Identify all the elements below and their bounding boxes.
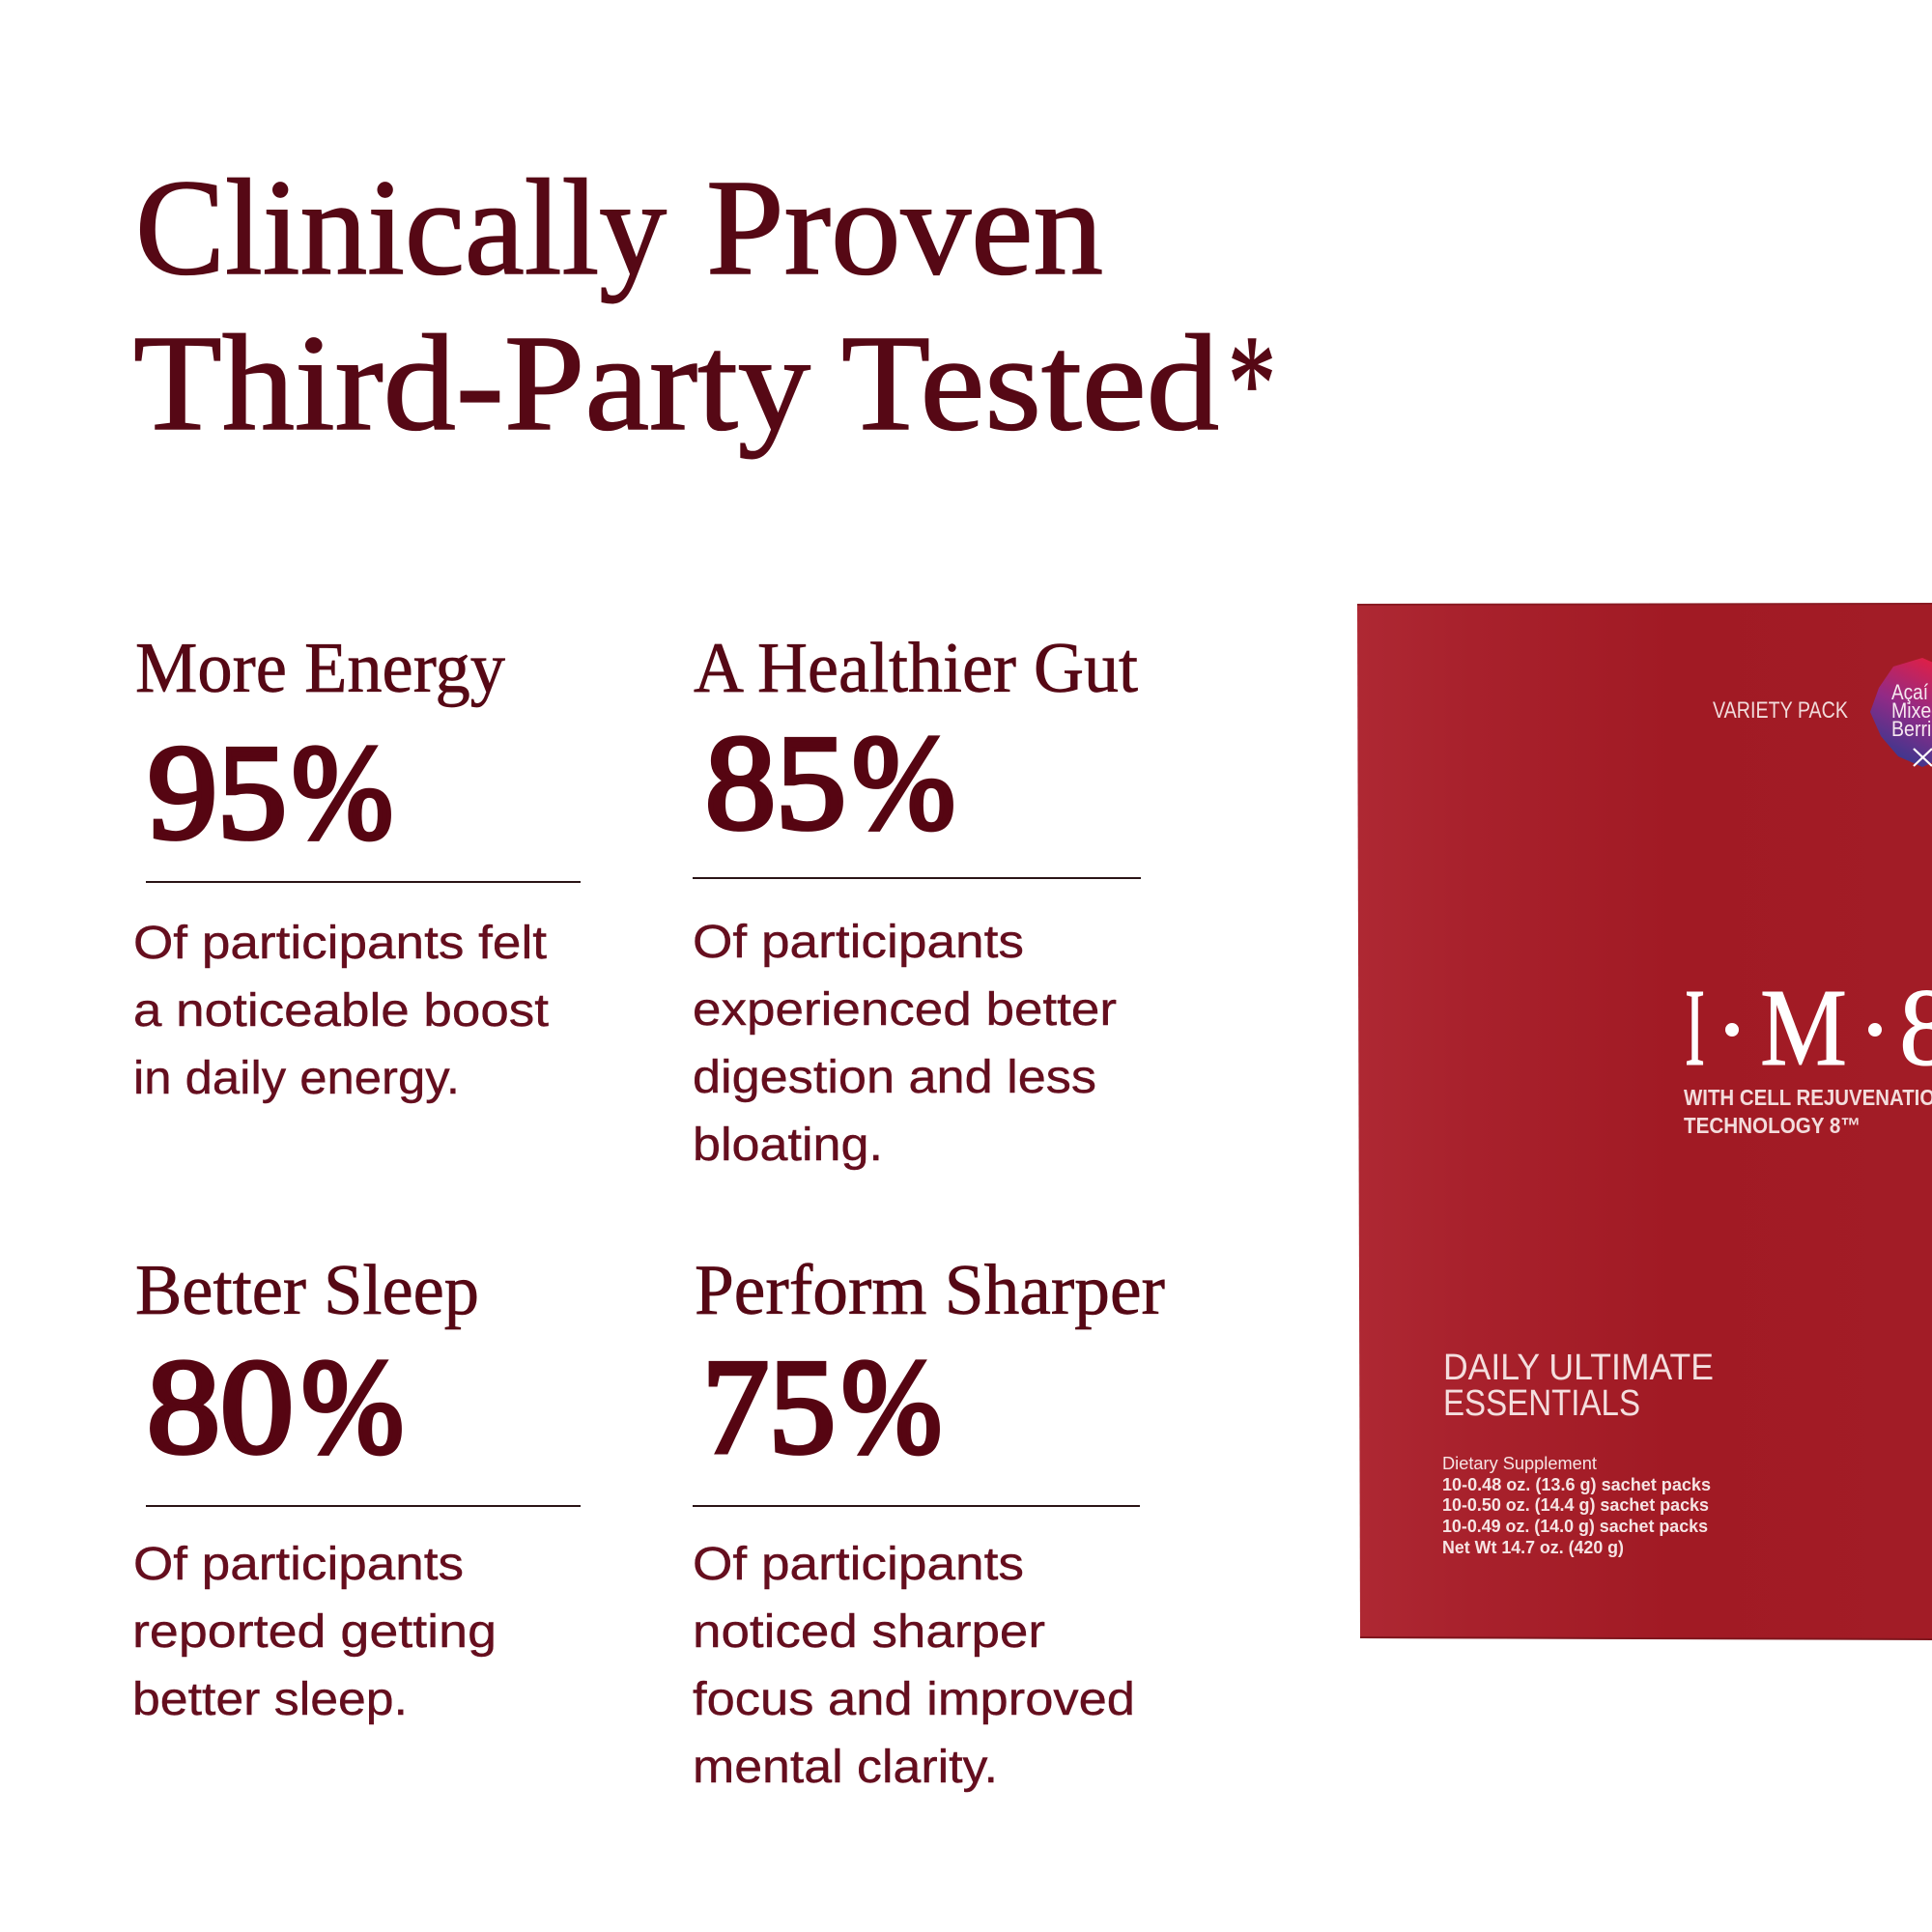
number: 85%: [705, 708, 955, 858]
text: perform sharper description: focus and improved: [693, 1674, 1135, 1725]
text: more energy description: in daily energy.: [133, 1053, 460, 1104]
text: product name: ESSENTIALS: [1443, 1383, 1640, 1424]
text: healthier gut description: [693, 917, 1117, 1171]
text: perform sharper description: mental clarity.: [693, 1742, 998, 1793]
number: 85%: %: [852, 708, 955, 858]
text: perform sharper description: Of participants: [693, 1539, 1024, 1590]
text: better sleep description: better sleep.: [132, 1674, 408, 1725]
text: more energy description: a noticeable boost: [133, 985, 549, 1037]
number: 80%: 80: [147, 1332, 294, 1482]
text: better sleep description: reported getting: [132, 1606, 497, 1658]
text: product name: [1443, 1348, 1714, 1424]
text: product details: Dietary Supplement: [1442, 1454, 1597, 1473]
title: *: [1228, 306, 1276, 459]
logo: IM8: I: [1685, 966, 1705, 1089]
text: technology tagline: TECHNOLOGY 8™: [1684, 1113, 1861, 1138]
logo: IM8: [1685, 966, 1932, 1089]
title: Third-Party: [133, 306, 810, 459]
title: Proven: [706, 151, 1103, 303]
number: 75%: [702, 1332, 942, 1482]
text: more energy description: Of participants felt: [133, 918, 547, 969]
title: Tested: [841, 306, 1219, 459]
text: technology tagline: [1684, 1085, 1932, 1138]
text: perform sharper description: [693, 1539, 1135, 1793]
number: 75%: 75: [702, 1332, 836, 1482]
number: 95%: 95: [148, 718, 287, 867]
text: product name: DAILY ULTIMATE: [1443, 1348, 1714, 1388]
stat: perform sharper: [693, 1251, 1165, 1793]
text: product details: Net Wt 14.7 oz. (420 g): [1442, 1538, 1624, 1557]
number: 80%: %: [301, 1332, 404, 1482]
heading: perform sharper: Perform Sharper: [695, 1251, 1165, 1330]
text: healthier gut description: digestion and less: [693, 1052, 1096, 1103]
text: better sleep description: [132, 1539, 497, 1725]
text: product details: 10-0.49 oz. (14.0 g) sachet packs: [1442, 1517, 1708, 1536]
title: Clinically: [135, 151, 667, 303]
text: product details: 10-0.50 oz. (14.4 g) sachet packs: [1442, 1495, 1709, 1515]
text: healthier gut description: experienced better: [693, 984, 1117, 1036]
number: 80%: [147, 1332, 404, 1482]
title: [133, 151, 1276, 459]
text: more energy description: [133, 918, 549, 1104]
label: variety pack: VARIETY PACK: [1713, 697, 1848, 724]
heading: better sleep: Better Sleep: [135, 1251, 479, 1330]
text: product details: [1442, 1454, 1711, 1557]
logo: IM8: M: [1760, 966, 1847, 1089]
text: healthier gut description: bloating.: [693, 1120, 883, 1171]
text: perform sharper description: noticed sharper: [693, 1606, 1045, 1658]
number: 95%: %: [292, 718, 393, 867]
heading: healthier gut: A Healthier Gut: [694, 629, 1138, 708]
stat: more energy: [133, 629, 581, 1104]
number: 95%: [148, 718, 393, 867]
product box: [1357, 604, 1932, 1639]
heading: more energy: More Energy: [135, 629, 505, 708]
number: 75%: %: [841, 1332, 942, 1482]
text: healthier gut description: Of participants: [693, 917, 1024, 968]
text: product details: 10-0.48 oz. (13.6 g) sachet packs: [1442, 1475, 1711, 1494]
badge: flavor: [1870, 658, 1932, 767]
text: better sleep description: Of participants: [133, 1539, 464, 1590]
stat: healthier gut: [693, 629, 1141, 1171]
stat: better sleep: [132, 1251, 581, 1725]
number: 85%: 85: [705, 708, 846, 858]
